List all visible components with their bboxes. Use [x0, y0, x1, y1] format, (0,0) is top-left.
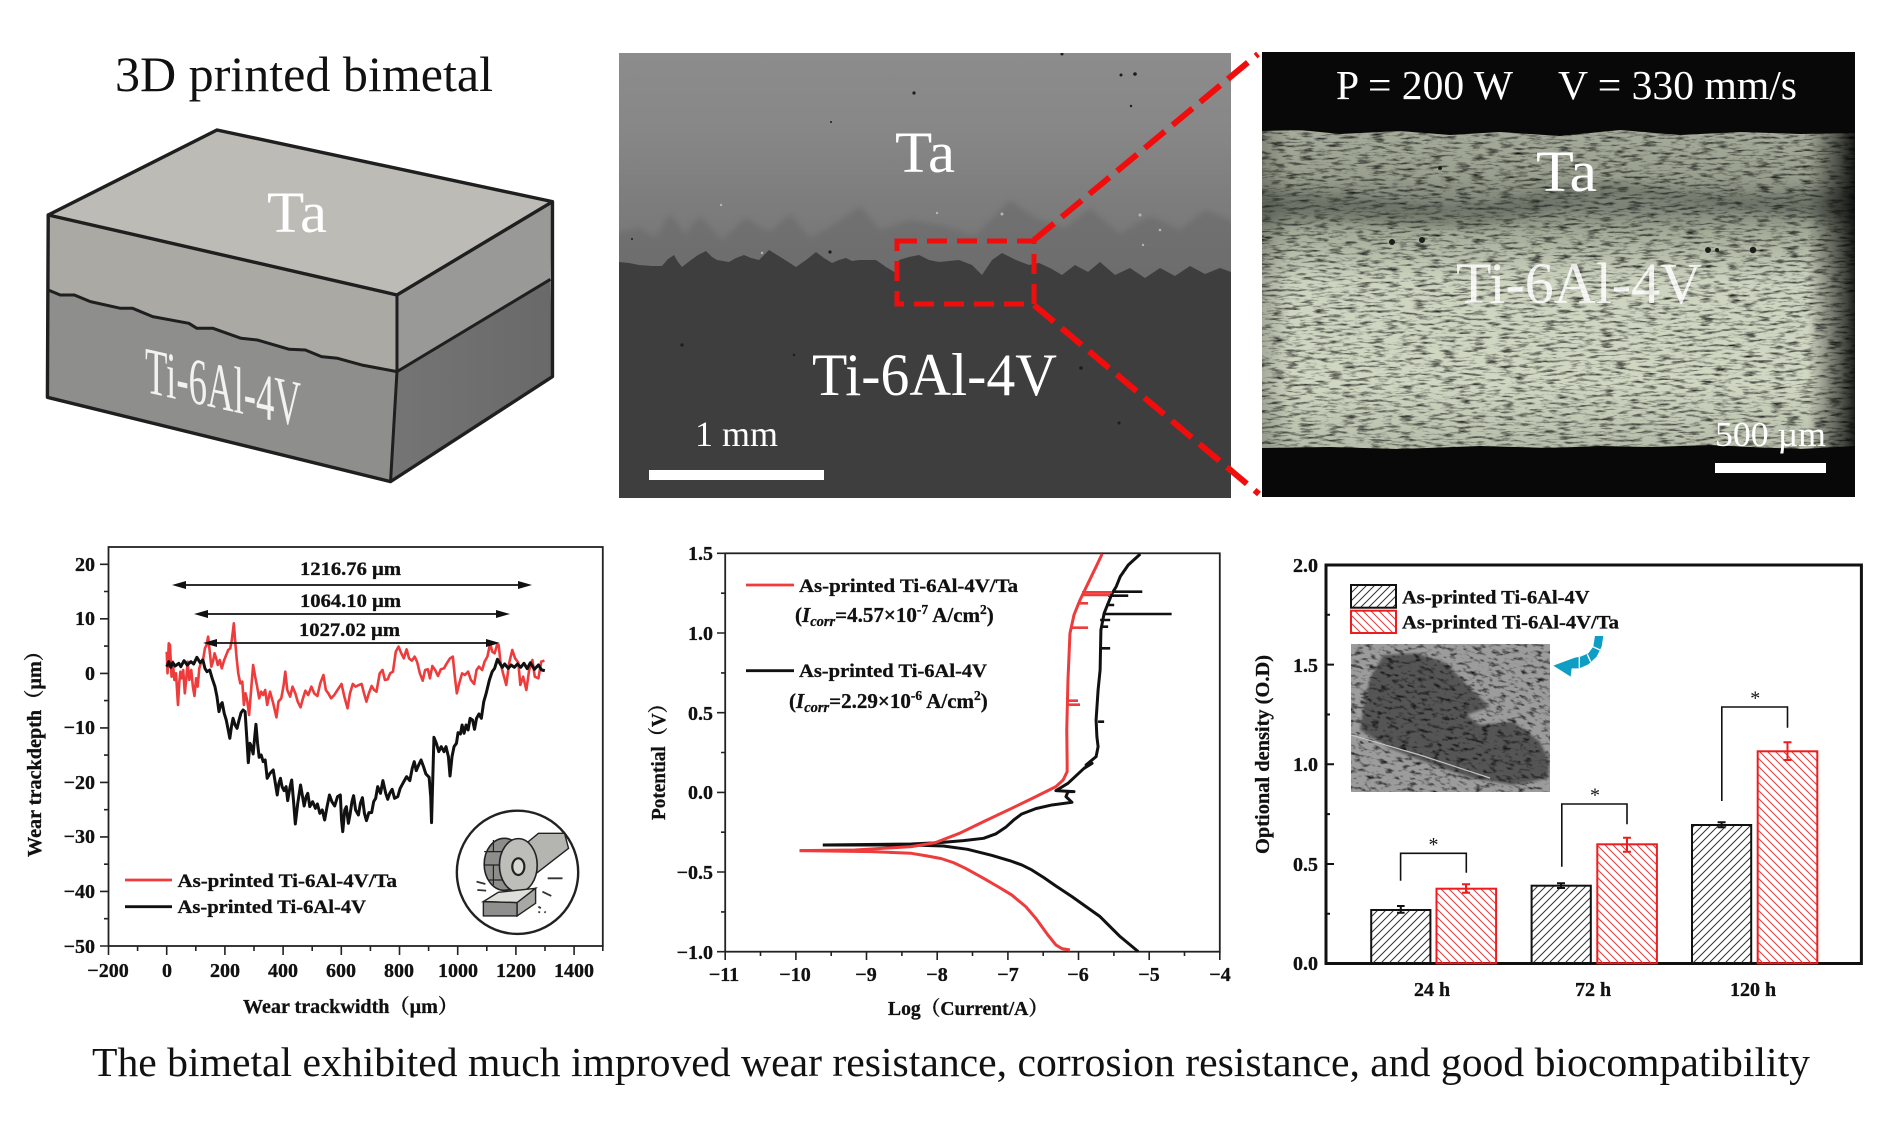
- legend: Ti-6Al-4V with Icorr: A/cm: [922, 689, 975, 713]
- legend: [125, 871, 398, 918]
- caption: The bimetal exhibited much improved wear resistance, corrosion resistance, and good biocompatibility: [92, 1039, 1810, 1085]
- label: Ti-6Al-4V: Ti-6Al-4V: [812, 342, 1057, 408]
- x tick labels: −7: [997, 964, 1019, 986]
- x tick labels: 800: [384, 960, 414, 982]
- y tick labels: −10: [64, 717, 95, 739]
- schematic: bimetal block: Ta: [267, 180, 327, 245]
- series: as-printed Ti-6Al-4V: [823, 554, 1172, 952]
- bars: 120 h: [1692, 742, 1817, 963]
- y tick labels: 1.0: [688, 623, 713, 645]
- legend: As-printed Ti-6Al-4V: [1402, 587, 1590, 608]
- y tick labels: [677, 543, 713, 964]
- legend: As-printed Ti-6Al-4V/Ta: [178, 871, 398, 892]
- zoom indicator: red dashed box and lines: [897, 54, 1259, 494]
- schematic: bimetal block: [47, 130, 552, 482]
- title: 3D printed bimetal: 3D printed bimetal: [115, 46, 493, 102]
- y tick labels: 20: [75, 554, 95, 576]
- legend: As-printed Ti-6Al-4V: [178, 897, 366, 918]
- y tick labels: 1.5: [1293, 655, 1318, 677]
- legend: Ti-6Al-4V with Icorr: 2: [974, 688, 981, 703]
- icon: grinding wheel wear test: [457, 811, 578, 934]
- y axis title: Wear trackdepth（µm）: [24, 641, 46, 857]
- legend: Ti-6Al-4V/Ta with Icorr: 2: [980, 602, 987, 617]
- series: as-printed Ti-6Al-4V/Ta: [167, 623, 544, 717]
- y axis title: Optional density (O.D): [1252, 655, 1274, 854]
- x tick labels: 1400: [554, 960, 594, 982]
- legend: Ti-6Al-4V with Icorr: corr: [804, 700, 830, 716]
- scale label: 500 um: 500 µm: [1715, 415, 1826, 454]
- plot frame and ticks: [1326, 565, 1861, 964]
- width annotation: 1027.02 um: [203, 620, 500, 647]
- y tick labels: [64, 554, 95, 958]
- arrow: curved teal pointer to inset: [1553, 636, 1603, 677]
- x tick labels: [709, 964, 1231, 986]
- chart: wear track profile: [24, 547, 603, 1018]
- x tick labels: 1200: [496, 960, 536, 982]
- legend: Ti-6Al-4V/Ta with Icorr: As-printed Ti-6Al-4V/Ta: [799, 576, 1019, 597]
- significance bracket: 120 h: [1722, 688, 1788, 801]
- y tick labels: 0.5: [1293, 854, 1318, 876]
- y tick labels: 0.5: [688, 703, 713, 725]
- legend: Ti-6Al-4V with Icorr: (I: [789, 689, 804, 713]
- width annotation: 1027.02 um: 1027.02 µm: [299, 620, 400, 641]
- SEM inset: cell on surface: [1351, 644, 1550, 792]
- x tick labels: −4: [1209, 964, 1231, 986]
- significance bracket: 24 h: *: [1428, 834, 1438, 856]
- x tick labels: 1000: [438, 960, 478, 982]
- series: as-printed Ti-6Al-4V/Ta: [800, 554, 1112, 950]
- scale bar: [649, 470, 824, 480]
- width annotation: 1216.76 um: [172, 559, 532, 589]
- x tick labels: 400: [268, 960, 298, 982]
- process parameters label: P = 200 W: [1336, 62, 1513, 108]
- legend: Ti-6Al-4V/Ta with Icorr: corr: [810, 614, 836, 630]
- y tick labels: −1.0: [677, 942, 713, 964]
- y tick labels: −0.5: [677, 862, 713, 884]
- y tick labels: 1.5: [688, 543, 713, 565]
- significance bracket: 72 h: [1562, 784, 1627, 867]
- x tick labels: −9: [855, 964, 877, 986]
- y tick labels: −30: [64, 826, 95, 848]
- x tick labels: 120 h: [1730, 979, 1776, 1001]
- process parameters label: [1336, 62, 1797, 108]
- x tick labels: 200: [210, 960, 240, 982]
- y tick labels: 0.0: [1293, 953, 1318, 975]
- legend: Ti-6Al-4V with Icorr: ): [981, 689, 988, 713]
- panel: SEM cross-section image: [600, 52, 1250, 498]
- legend: Ti-6Al-4V/Ta with Icorr: -7: [917, 602, 928, 617]
- chart: cell optical density bars: [1252, 555, 1861, 1001]
- width annotation: 1216.76 um: 1216.76 µm: [300, 559, 401, 580]
- x tick labels: 0: [162, 960, 172, 982]
- panel: optical micrograph: [1262, 52, 1855, 497]
- legend: Ti-6Al-4V/Ta with Icorr: ): [987, 603, 994, 627]
- x tick labels: −200: [87, 960, 129, 982]
- x tick labels: 24 h: [1414, 979, 1450, 1001]
- x tick labels: −11: [709, 964, 739, 986]
- width annotation: 1064.10 um: [194, 591, 510, 618]
- label: Ti-6Al-4V: Ti-6Al-4V: [1456, 251, 1702, 316]
- y tick labels: 0: [85, 663, 95, 685]
- legend: Ti-6Al-4V/Ta with Icorr: [746, 576, 1019, 630]
- y tick labels: 10: [75, 608, 95, 630]
- label: Ta: Ta: [895, 120, 955, 185]
- y tick labels: −20: [64, 772, 95, 794]
- plot frame and ticks: [717, 553, 1220, 960]
- x tick labels: [87, 960, 594, 982]
- chart: potentiodynamic polarization curves: [648, 543, 1231, 1020]
- legend: [1351, 585, 1620, 633]
- scale bar: [1715, 463, 1826, 473]
- x axis title: Wear trackwidth（µm）: [243, 996, 458, 1018]
- legend: Ti-6Al-4V/Ta with Icorr: A/cm: [928, 603, 981, 627]
- x tick labels: 600: [326, 960, 356, 982]
- label: Ta: Ta: [1536, 139, 1597, 204]
- bars: 24 h: [1371, 884, 1496, 963]
- y tick labels: [1293, 555, 1318, 975]
- y tick labels: 1.0: [1293, 754, 1318, 776]
- x tick labels: −10: [779, 964, 811, 986]
- legend: As-printed Ti-6Al-4V/Ta: [1402, 612, 1620, 633]
- x tick labels: [1414, 979, 1776, 1001]
- x tick labels: 72 h: [1575, 979, 1611, 1001]
- y tick labels: 0.0: [688, 782, 713, 804]
- y tick labels: 2.0: [1293, 555, 1318, 577]
- legend: Ti-6Al-4V with Icorr: =2.29×10: [829, 689, 911, 713]
- x axis title: Log（Current/A）: [888, 998, 1048, 1020]
- legend: Ti-6Al-4V with Icorr: -6: [911, 688, 922, 703]
- x tick labels: −6: [1067, 964, 1089, 986]
- scale label: 1 mm: 1 mm: [695, 414, 778, 454]
- y tick labels: −50: [64, 936, 95, 958]
- significance bracket: 72 h: *: [1590, 784, 1600, 806]
- y tick labels: −40: [64, 881, 95, 903]
- significance bracket: 24 h: [1401, 834, 1466, 881]
- process parameters label: V = 330 mm/s: [1558, 62, 1797, 108]
- significance bracket: 120 h: *: [1750, 688, 1760, 710]
- schematic: bimetal block: Ti-6Al-4V: [145, 334, 301, 442]
- width annotation: 1064.10 um: 1064.10 µm: [300, 591, 401, 612]
- plot frame and ticks: [100, 547, 603, 955]
- legend: Ti-6Al-4V with Icorr: [746, 661, 988, 716]
- y axis title: Potential（V）: [648, 694, 670, 820]
- x tick labels: −8: [926, 964, 948, 986]
- bars: 72 h: [1532, 838, 1657, 963]
- legend: Ti-6Al-4V with Icorr: As-printed Ti-6Al-4V: [799, 661, 987, 682]
- legend: Ti-6Al-4V/Ta with Icorr: (I: [795, 603, 810, 627]
- x tick labels: −5: [1138, 964, 1160, 986]
- legend: Ti-6Al-4V/Ta with Icorr: =4.57×10: [835, 603, 917, 627]
- series: as-printed Ti-6Al-4V: [167, 657, 545, 832]
